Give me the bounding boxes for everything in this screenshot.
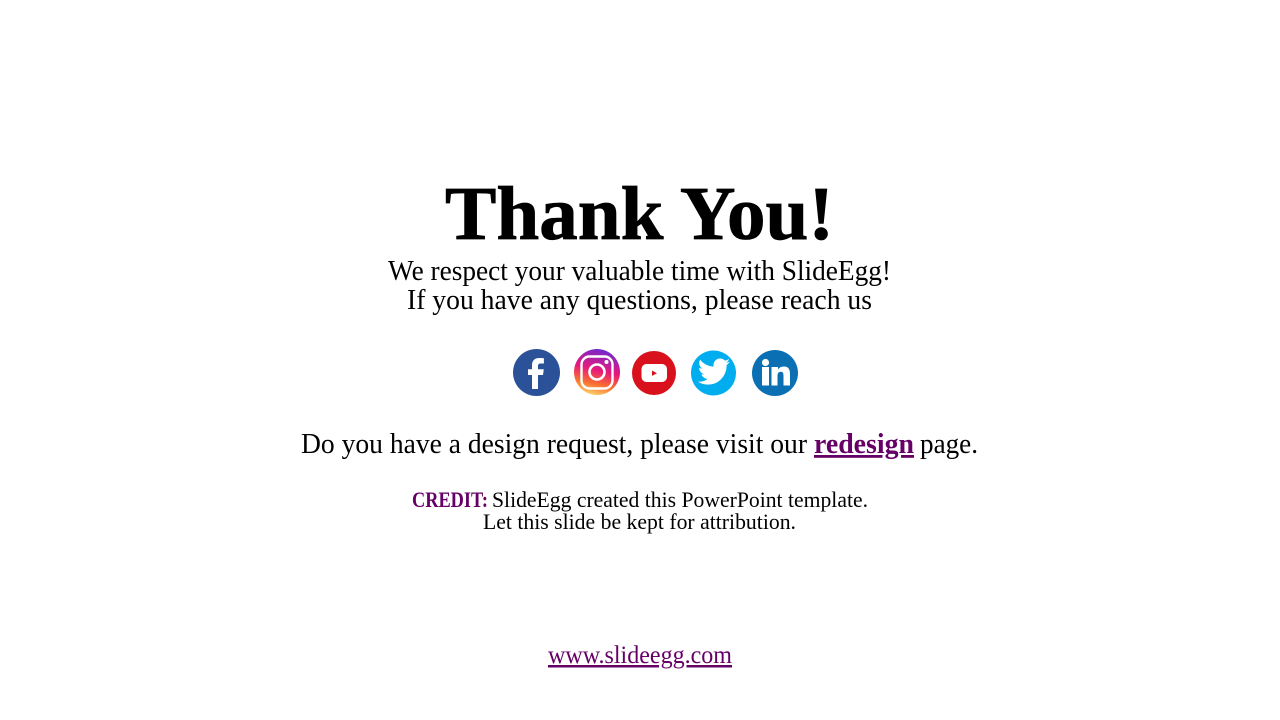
design request line: page.	[920, 429, 978, 460]
icon: twitter	[691, 350, 736, 396]
website link: www.slideegg.com	[548, 642, 733, 669]
social icons row	[513, 349, 798, 396]
credit text: CREDIT:	[412, 487, 488, 512]
icon: linkedin	[752, 350, 798, 396]
credit text	[412, 487, 868, 534]
credit text: SlideEgg created this PowerPoint template.	[492, 487, 868, 512]
title: Thank You!	[445, 172, 834, 256]
design request line: redesign	[814, 429, 914, 460]
icon: youtube	[632, 351, 676, 395]
subtitle text: We respect your valuable time with SlideEgg!	[388, 256, 891, 287]
icon: facebook	[513, 349, 560, 396]
design request line: Do you have a design request, please visit our	[301, 429, 808, 460]
icon: instagram	[574, 349, 620, 395]
subtitle text	[388, 256, 891, 316]
credit text: Let this slide be kept for attribution.	[483, 509, 796, 534]
subtitle text: If you have any questions, please reach us	[407, 285, 872, 316]
